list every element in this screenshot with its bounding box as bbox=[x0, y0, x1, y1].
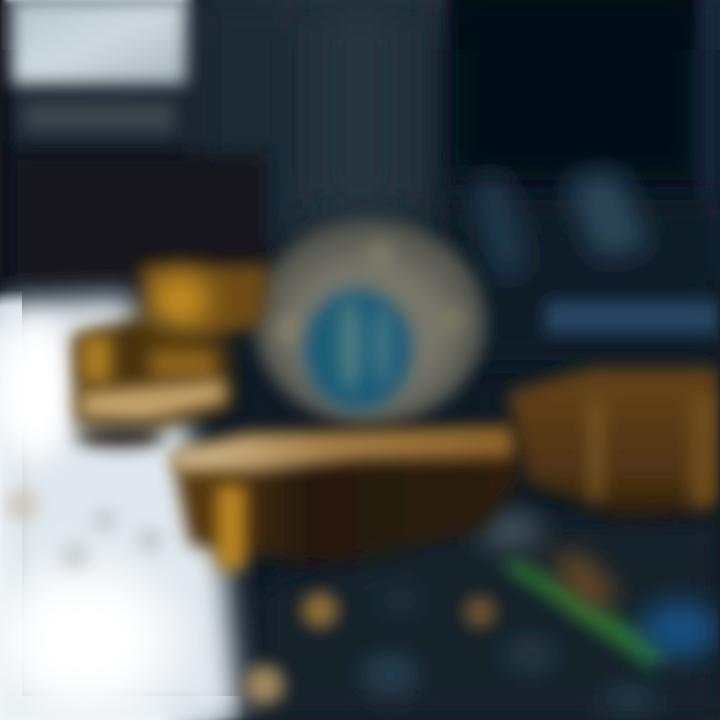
dark keyboard surface: lower right bbox=[262, 510, 720, 720]
gold stack: centre foreground bbox=[172, 426, 520, 570]
coin: large silver-gold with blue centre bbox=[254, 220, 486, 424]
small gold coins: foreground bbox=[244, 592, 496, 705]
gold stack: left bbox=[72, 265, 270, 447]
chart stripes: green and blue lower right bbox=[500, 555, 720, 668]
gold stack: right bbox=[508, 368, 720, 518]
background: dark room bbox=[0, 0, 720, 360]
window: bright top-left bbox=[12, 0, 186, 132]
background shapes: blue panels at right bbox=[470, 170, 720, 334]
table: white surface bbox=[0, 296, 240, 720]
